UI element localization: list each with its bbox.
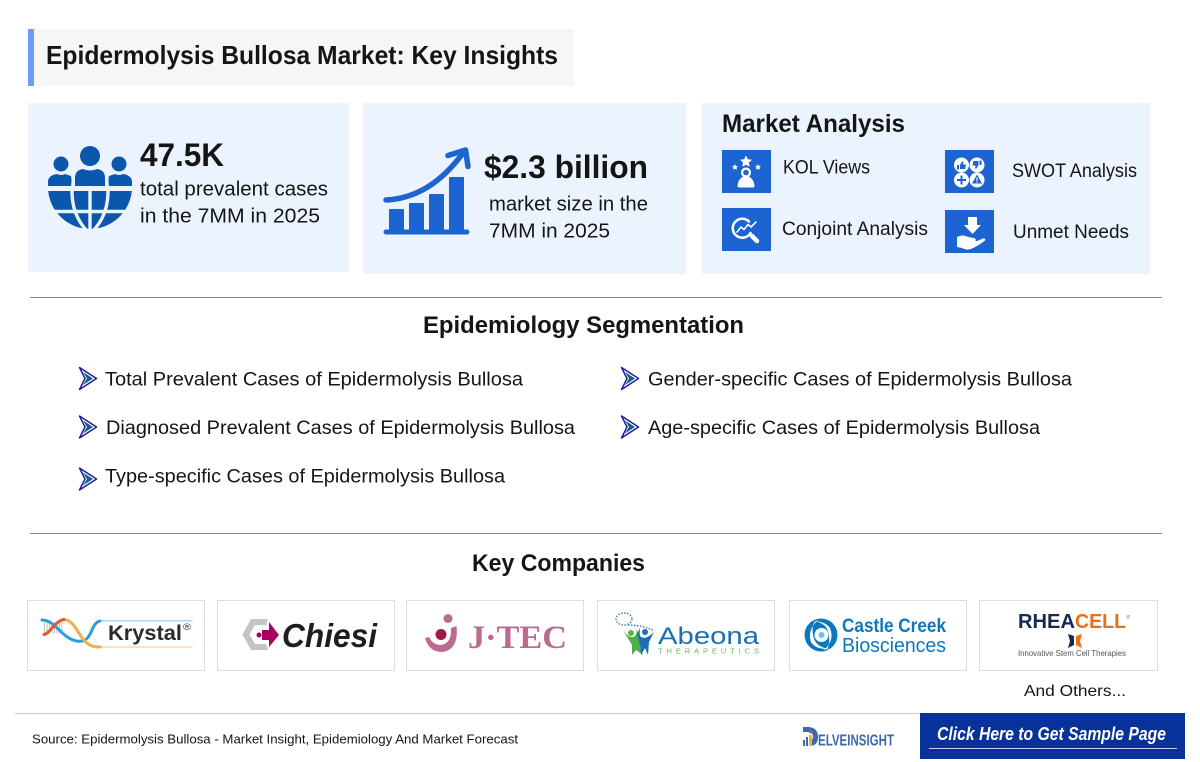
title (28, 29, 574, 86)
label: KOL views: KOL Views (783, 158, 870, 178)
logo: Krystal: ® (183, 622, 191, 632)
source note: Source: Epidermolysis Bullosa - Market Insight, Epidemiology And Market Forecast (32, 732, 518, 746)
button: get sample page: Click Here to Get Sample Page (937, 724, 1166, 744)
logo: J-TEC: J·TEC (468, 620, 567, 656)
stat: $2.3 billion: $2.3 billion (484, 149, 648, 185)
stat: 47.5K: 47.5K (140, 137, 224, 173)
text: 7MM in 2025: 7MM in 2025 (489, 220, 610, 242)
logo: Chiesi (218, 600, 394, 670)
panel: market analysis (702, 103, 1150, 274)
icon: SWOT analysis (945, 150, 994, 193)
icon: people on globe (44, 146, 136, 232)
logo: Krystal: Krystal (108, 622, 182, 645)
bullet: total prevalent cases: Total Prevalent Cases of Epidermolysis Bullosa (105, 368, 523, 390)
heading: market analysis: Market Analysis (722, 110, 905, 138)
icon: KOL views (722, 150, 771, 193)
logo: DelveInsight (803, 727, 894, 750)
text: in the 7MM in 2025: in the 7MM in 2025 (140, 204, 320, 228)
logo: Castle Creek Biosciences: Biosciences (842, 635, 946, 657)
icon: unmet needs (945, 210, 994, 253)
logo: Rheacell (980, 600, 1158, 670)
list: epidemiology segments (80, 368, 1072, 490)
logo: DelveInsight: ELVEINSIGHT (818, 732, 894, 750)
icon: growth bar chart (386, 150, 468, 232)
icon: conjoint analysis (722, 208, 771, 251)
bullet: diagnosed prevalent cases: Diagnosed Prevalent Cases of Epidermolysis Bullosa (106, 417, 575, 439)
logo: Castle Creek Biosciences (790, 600, 966, 670)
title: Epidermolysis Bullosa Market: Key Insights (46, 40, 558, 70)
label: conjoint analysis: Conjoint Analysis (782, 219, 928, 240)
label: unmet needs: Unmet Needs (1013, 222, 1129, 243)
logo: Abeona (598, 600, 774, 670)
text: market size in the: market size in the (489, 192, 648, 216)
logo: Abeona: THERAPEUTICS (658, 646, 759, 656)
bullet: age-specific cases: Age-specific Cases of Epidermolysis Bullosa (648, 417, 1040, 439)
heading: epidemiology segmentation: Epidemiology Segmentation (423, 312, 744, 339)
bullet: gender-specific cases: Gender-specific Cases of Epidermolysis Bullosa (648, 368, 1072, 390)
heading: key companies: Key Companies (472, 550, 645, 577)
logo: Krystal (28, 600, 204, 670)
text: and others: And Others... (1024, 683, 1126, 700)
button: get sample page (920, 713, 1185, 759)
logo: Abeona: Abeona (658, 623, 760, 650)
logo: Rheacell: Innovative Stem Cell Therapies (1018, 648, 1126, 658)
logo: Rheacell: ® (1126, 614, 1130, 621)
logo: J-TEC (406, 600, 584, 670)
logo: Castle Creek Biosciences: Castle Creek (842, 615, 946, 637)
panel: prevalent cases (28, 103, 349, 272)
logo: Rheacell: CELL (1075, 611, 1126, 633)
logo: Chiesi: Chiesi (282, 617, 378, 654)
bullet: type-specific cases: Type-specific Cases of Epidermolysis Bullosa (105, 466, 505, 488)
text: total prevalent cases: total prevalent cases (140, 178, 328, 200)
logo: Rheacell: RHEA (1018, 611, 1075, 633)
panel: market size (363, 103, 686, 274)
label: SWOT analysis: SWOT Analysis (1012, 161, 1137, 182)
